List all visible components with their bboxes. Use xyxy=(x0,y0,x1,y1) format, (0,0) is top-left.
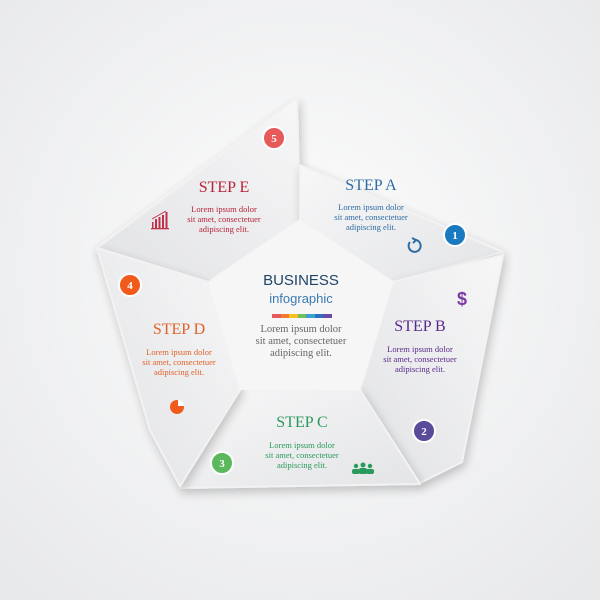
badge 4 xyxy=(119,274,141,296)
badge 2 xyxy=(413,420,435,442)
icon: refresh xyxy=(409,238,421,252)
step A text: STEP A xyxy=(345,177,397,194)
step D text: STEP D xyxy=(153,321,205,338)
icon: dollar: $ xyxy=(457,289,467,309)
step A text xyxy=(334,177,408,232)
title xyxy=(263,272,339,306)
step D text: Lorem ipsum dolor xyxy=(146,347,212,357)
step C text: STEP C xyxy=(276,414,328,431)
step C text: Lorem ipsum dolor xyxy=(269,440,335,450)
step C text xyxy=(265,414,339,470)
icon: people xyxy=(352,462,374,474)
step E text xyxy=(187,179,261,234)
badge 3 xyxy=(211,452,233,474)
step E text: STEP E xyxy=(199,179,249,196)
icon: bar chart xyxy=(151,211,169,229)
badge 2: 2 xyxy=(421,426,427,438)
step D text: sit amet, consectetuer xyxy=(142,357,216,367)
step B text: sit amet, consectetuer xyxy=(383,354,457,364)
step B text: STEP B xyxy=(394,318,446,335)
badge 5 xyxy=(263,127,285,149)
panel: step A xyxy=(300,165,503,282)
panel: step C xyxy=(180,390,420,488)
step C text: adipiscing elit. xyxy=(277,460,327,470)
icon: pie chart xyxy=(170,400,184,414)
step E text: Lorem ipsum dolor xyxy=(191,204,257,214)
badge 1: 1 xyxy=(452,230,458,242)
panel: step E xyxy=(97,98,300,282)
step E text: adipiscing elit. xyxy=(199,224,249,234)
center text: Lorem ipsum dolor xyxy=(260,324,342,335)
panel: center pentagon xyxy=(208,219,393,390)
center text xyxy=(256,324,347,359)
badge 3: 3 xyxy=(219,458,225,470)
step E text: sit amet, consectetuer xyxy=(187,214,261,224)
rainbow bar xyxy=(272,314,332,318)
panel: step D xyxy=(97,248,240,486)
step D text xyxy=(142,321,216,377)
step A text: sit amet, consectetuer xyxy=(334,212,408,222)
step B text: Lorem ipsum dolor xyxy=(387,344,453,354)
title: infographic xyxy=(269,291,333,306)
title: BUSINESS xyxy=(263,272,339,289)
center text: sit amet, consectetuer xyxy=(256,336,347,347)
badge 4: 4 xyxy=(127,280,133,292)
badge 5: 5 xyxy=(271,133,277,145)
step C text: sit amet, consectetuer xyxy=(265,450,339,460)
badge 1 xyxy=(444,224,466,246)
panel: step B xyxy=(360,255,503,483)
step A text: adipiscing elit. xyxy=(346,222,396,232)
center text: adipiscing elit. xyxy=(270,348,332,359)
step A text: Lorem ipsum dolor xyxy=(338,202,404,212)
step B text: adipiscing elit. xyxy=(395,364,445,374)
step B text xyxy=(383,318,457,374)
step D text: adipiscing elit. xyxy=(154,367,204,377)
